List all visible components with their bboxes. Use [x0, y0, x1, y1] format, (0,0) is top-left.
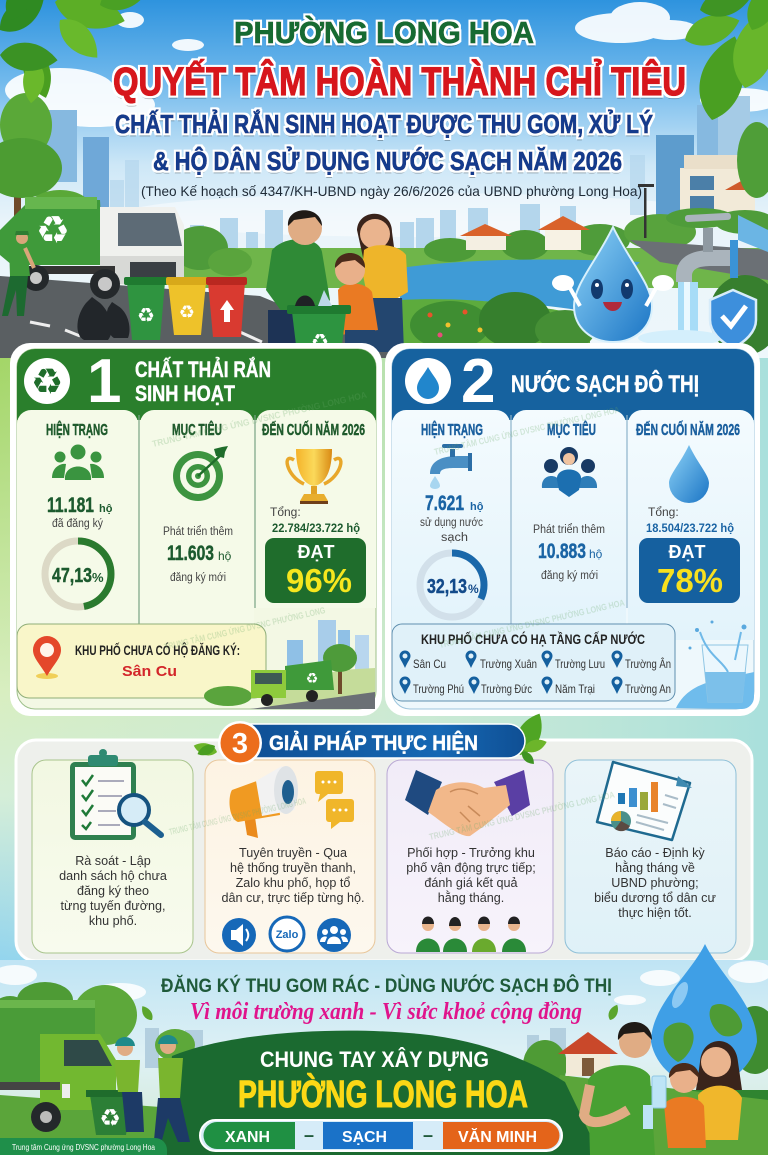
current value: 11.181 [47, 494, 94, 517]
grass [0, 1075, 768, 1155]
icon: recycle badge [24, 358, 70, 404]
result badge 78% [639, 538, 740, 603]
icon: map pin [33, 636, 61, 679]
green bin [287, 290, 351, 353]
callout: neighbourhoods without water infrastructure [392, 624, 675, 701]
man [584, 1022, 655, 1155]
result badge 96%: 96% [286, 562, 352, 599]
result badge 96% [265, 538, 366, 603]
clouds [5, 2, 768, 237]
icon: Zalo [270, 917, 304, 951]
current value: hộ [99, 503, 113, 515]
columns [17, 410, 376, 640]
card text: UBND phường; [611, 876, 699, 890]
target text: 10.883 [538, 540, 586, 563]
total: Tổng: [648, 505, 679, 519]
boy [664, 1063, 706, 1148]
title line 3: CHẤT THẢI RẮN SINH HOẠT ĐƯỢC THU GOM, XỬ LÝ [115, 108, 653, 139]
leaves top-left [0, 0, 154, 105]
card text: dân cư, trực tiếp từng hộ. [222, 891, 364, 905]
header scene illustration [0, 0, 768, 358]
total [646, 505, 734, 535]
call to action: CHUNG TAY XÂY DỰNG [260, 1047, 489, 1072]
shield [710, 290, 756, 348]
icon: tap [430, 444, 472, 489]
card text: Phối hợp - Trưởng khu [407, 846, 535, 860]
neighbourhood names: Trường Xuân [480, 657, 537, 671]
watermarks: TRUNG TÂM CUNG ỨNG DVSNC PHƯỜNG LONG HOA [151, 389, 368, 449]
result badge 96%: ĐẠT [298, 542, 334, 562]
woman [696, 1041, 742, 1140]
column headings: MỤC TIÊU [172, 421, 222, 439]
section 3 header ribbon [192, 709, 551, 767]
garbage truck: ♻ [36, 208, 70, 252]
water drop mascot [552, 227, 674, 342]
card text: hệ thống truyền thanh, [230, 861, 356, 875]
man [266, 210, 330, 348]
recycling bins: ♻ [179, 302, 195, 323]
pill: green clean civilized: – [423, 1125, 433, 1145]
card: communication [205, 760, 375, 953]
target text: hộ [589, 547, 603, 561]
callout: neighbourhood without registrations: Sân Cu [122, 663, 177, 680]
trees left [0, 982, 195, 1061]
organisation tag: Trung tâm Cung ứng DVSNC phường Long Hoa [12, 1143, 155, 1152]
neighbourhood names: Sân Cu [413, 657, 446, 671]
far skyline [110, 155, 645, 270]
green hill [160, 1031, 600, 1155]
officers [416, 916, 526, 952]
card: reporting [565, 760, 736, 953]
card text: thực hiện tốt. [618, 906, 692, 920]
target text [533, 524, 605, 582]
icon: clipboard with magnifier [70, 749, 161, 840]
card text [59, 854, 167, 928]
neighbourhood names: Năm Trại [555, 682, 595, 696]
watermarks: TRUNG TÂM CUNG ỨNG DVSNC PHƯỜNG LONG HOA [433, 403, 621, 457]
slogan line: ĐĂNG KÝ THU GOM RÁC - DÙNG NƯỚC SẠCH ĐÔ THỊ [161, 973, 612, 997]
progress ring 47,13% [45, 541, 111, 607]
icon: target [173, 446, 228, 501]
card text: Báo cáo - Định kỳ [605, 846, 705, 860]
callout: neighbourhood without registrations: KHU PHỐ CHƯA CÓ HỘ ĐĂNG KÝ: [75, 641, 240, 658]
progress ring 47,13%: % [92, 570, 104, 585]
card text: đăng ký theo [77, 884, 149, 898]
icon: water drop [669, 445, 709, 503]
flower bushes [410, 275, 768, 355]
card text [406, 846, 536, 905]
near towers [47, 96, 750, 225]
icon: people [52, 444, 104, 480]
boy [335, 253, 378, 350]
clouds [0, 961, 768, 1005]
column headings [421, 421, 740, 439]
current value [420, 492, 484, 544]
column headings: MỤC TIÊU [547, 421, 596, 439]
water glass [643, 1076, 666, 1129]
neighbourhood names: Trường Ân [625, 656, 671, 671]
card text: danh sách hộ chưa [59, 869, 167, 883]
card text: hằng tháng. [438, 890, 504, 905]
leaves left [192, 739, 219, 759]
current value [47, 494, 113, 530]
panel 1: solid waste [10, 343, 382, 716]
progress ring 47,13%: 47,13 [52, 565, 92, 587]
plan reference: (Theo Kế hoạch số 4347/KH-UBND ngày 26/6/2026 của UBND phường Long Hoa) [141, 183, 642, 199]
icon: Zalo: Zalo [276, 929, 299, 941]
column headings [46, 421, 365, 439]
icon: megaphone [230, 766, 354, 838]
current value: hộ [470, 501, 484, 513]
left tree [0, 93, 94, 270]
total [270, 505, 360, 535]
target text: Phát triển thêm [163, 526, 233, 538]
organisation tag [0, 1138, 167, 1155]
card: review [32, 749, 193, 953]
garbage truck [0, 197, 184, 299]
footer family [584, 1022, 742, 1155]
icon: handshake [405, 770, 530, 836]
section heading: NƯỚC SẠCH ĐÔ THỊ [511, 370, 699, 398]
column headings: HIỆN TRẠNG [46, 421, 108, 439]
workers with bin [86, 1035, 190, 1142]
result badge 78%: 78% [657, 562, 723, 599]
riverside houses [460, 216, 590, 250]
target text [163, 526, 233, 584]
section number: 2 [461, 347, 495, 416]
river [400, 260, 640, 312]
pink slogan: Vì môi trường xanh - Vì sức khoẻ cộng đồng [190, 999, 582, 1025]
target text: đăng ký mới [541, 570, 598, 582]
watermarks [151, 389, 626, 842]
ward name: PHƯỜNG LONG HOA [238, 1072, 528, 1116]
target text: 11.603 [167, 542, 214, 565]
card text: từng tuyến đường, [61, 899, 165, 913]
card text: Zalo khu phố, họp tổ [236, 876, 350, 890]
card text: khu phố. [89, 914, 137, 928]
footer truck [0, 1000, 116, 1132]
total: 22.784/23.722 hộ [272, 521, 360, 535]
pins [400, 650, 622, 694]
pill: green clean civilized [200, 1120, 562, 1151]
right greenery [523, 1006, 768, 1155]
current value: sử dụng nước [420, 517, 483, 529]
card text: Tuyên truyền - Qua [239, 846, 347, 860]
trash bags [77, 297, 130, 340]
card text: phố vận động trực tiếp; [406, 861, 536, 875]
icon: group [317, 918, 351, 952]
result badge 78%: ĐẠT [668, 542, 706, 562]
mini truck scene: ♻ [306, 671, 318, 687]
current value: đã đăng ký [52, 518, 103, 530]
target text: hộ [218, 549, 232, 563]
column headings: HIỆN TRẠNG [421, 421, 483, 439]
title line 1: PHƯỜNG LONG HOA [234, 14, 534, 50]
watermarks: TRUNG TÂM CUNG ỨNG DVSNC PHƯỜNG LONG HOA [168, 795, 307, 837]
globe water drop [651, 944, 757, 1086]
card: coordination [387, 760, 553, 953]
neighbourhood names: Trường Phú [413, 682, 464, 696]
green bin: ♻ [311, 329, 329, 353]
recycling bins [124, 277, 247, 340]
target text: đăng ký mới [170, 572, 226, 584]
card text [594, 846, 716, 920]
pill: green clean civilized: VĂN MINH [458, 1127, 537, 1146]
right villa [638, 155, 768, 238]
water tap [638, 213, 768, 346]
number badge [218, 721, 262, 765]
mini truck scene [204, 620, 375, 709]
icon: speaker [222, 918, 256, 952]
panel 2: clean water [385, 343, 760, 716]
total: Tổng: [270, 505, 301, 519]
skyline [145, 1028, 566, 1070]
neighbourhood names: Trường An [625, 682, 671, 696]
section heading: SINH HOẠT [135, 381, 235, 406]
road and grass [0, 276, 410, 358]
card text: hằng tháng về [615, 860, 695, 875]
target text: Phát triển thêm [533, 524, 605, 536]
title [113, 14, 686, 199]
callout: neighbourhood without registrations [17, 624, 266, 698]
panel 3: solutions [16, 740, 752, 961]
leaves right [508, 709, 551, 767]
recycling bins: ♻ [137, 303, 155, 327]
leaf ornaments [139, 1003, 621, 1022]
current value: sạch [441, 532, 468, 544]
section number: 1 [87, 347, 121, 416]
section heading [135, 357, 271, 406]
house [558, 1032, 618, 1076]
neighbourhood names: Trường Lưu [555, 657, 605, 671]
water glass [676, 620, 754, 709]
progress ring 32,13% [420, 553, 484, 617]
icon: trophy [287, 449, 341, 504]
footer banner [0, 944, 768, 1155]
watermarks: TRUNG TÂM CUNG ỨNG DVSNC PHƯỜNG LONG HOA [428, 788, 616, 842]
callout: neighbourhoods without water infrastructure: KHU PHỐ CHƯA CÓ HẠ TẦNG CẤP NƯỚC [421, 630, 645, 647]
neighbourhood names: Trường Đức [481, 682, 532, 696]
family with bin [266, 210, 408, 353]
neighbourhood names [413, 656, 671, 696]
icon: recycle badge: ♻ [31, 362, 63, 403]
number badge: 3 [232, 728, 248, 760]
watermarks: TRUNG TÂM CUNG ỨNG DVSNC PHƯỜNG LONG [163, 604, 326, 652]
card text: Rà soát - Lập [75, 854, 151, 868]
worker [2, 231, 34, 316]
right tree [737, 122, 768, 198]
section heading: CHẤT THẢI RẮN [135, 357, 271, 382]
pill: green clean civilized: XANH [225, 1129, 270, 1146]
card text: biểu dương tổ dân cư [594, 891, 716, 905]
column headings: ĐẾN CUỐI NĂM 2026 [262, 421, 365, 439]
section 3 header ribbon: GIẢI PHÁP THỰC HIỆN [269, 731, 478, 755]
workers with bin: ♻ [99, 1104, 121, 1132]
pill: green clean civilized: – [304, 1125, 314, 1145]
horizon greenery [172, 214, 768, 288]
pill: green clean civilized: SẠCH [342, 1129, 387, 1146]
title line 4: & HỘ DÂN SỬ DỤNG NƯỚC SẠCH NĂM 2026 [153, 145, 622, 176]
icon: report document [597, 762, 692, 840]
leaves top-right [681, 0, 768, 126]
icon: people [542, 447, 597, 497]
icon: drop badge [405, 358, 451, 404]
current value: 7.621 [425, 492, 464, 515]
woman [357, 214, 408, 352]
columns [392, 410, 754, 640]
progress ring 32,13%: 32,13 [427, 576, 467, 598]
watermarks: TRUNG TÂM CUNG ỨNG DVSNC PHƯỜNG LONG HOA [438, 596, 626, 650]
card text: đánh giá kết quả [424, 876, 518, 890]
total: 18.504/23.722 hộ [646, 521, 734, 535]
progress ring 32,13%: % [468, 582, 479, 596]
card text [222, 846, 364, 905]
